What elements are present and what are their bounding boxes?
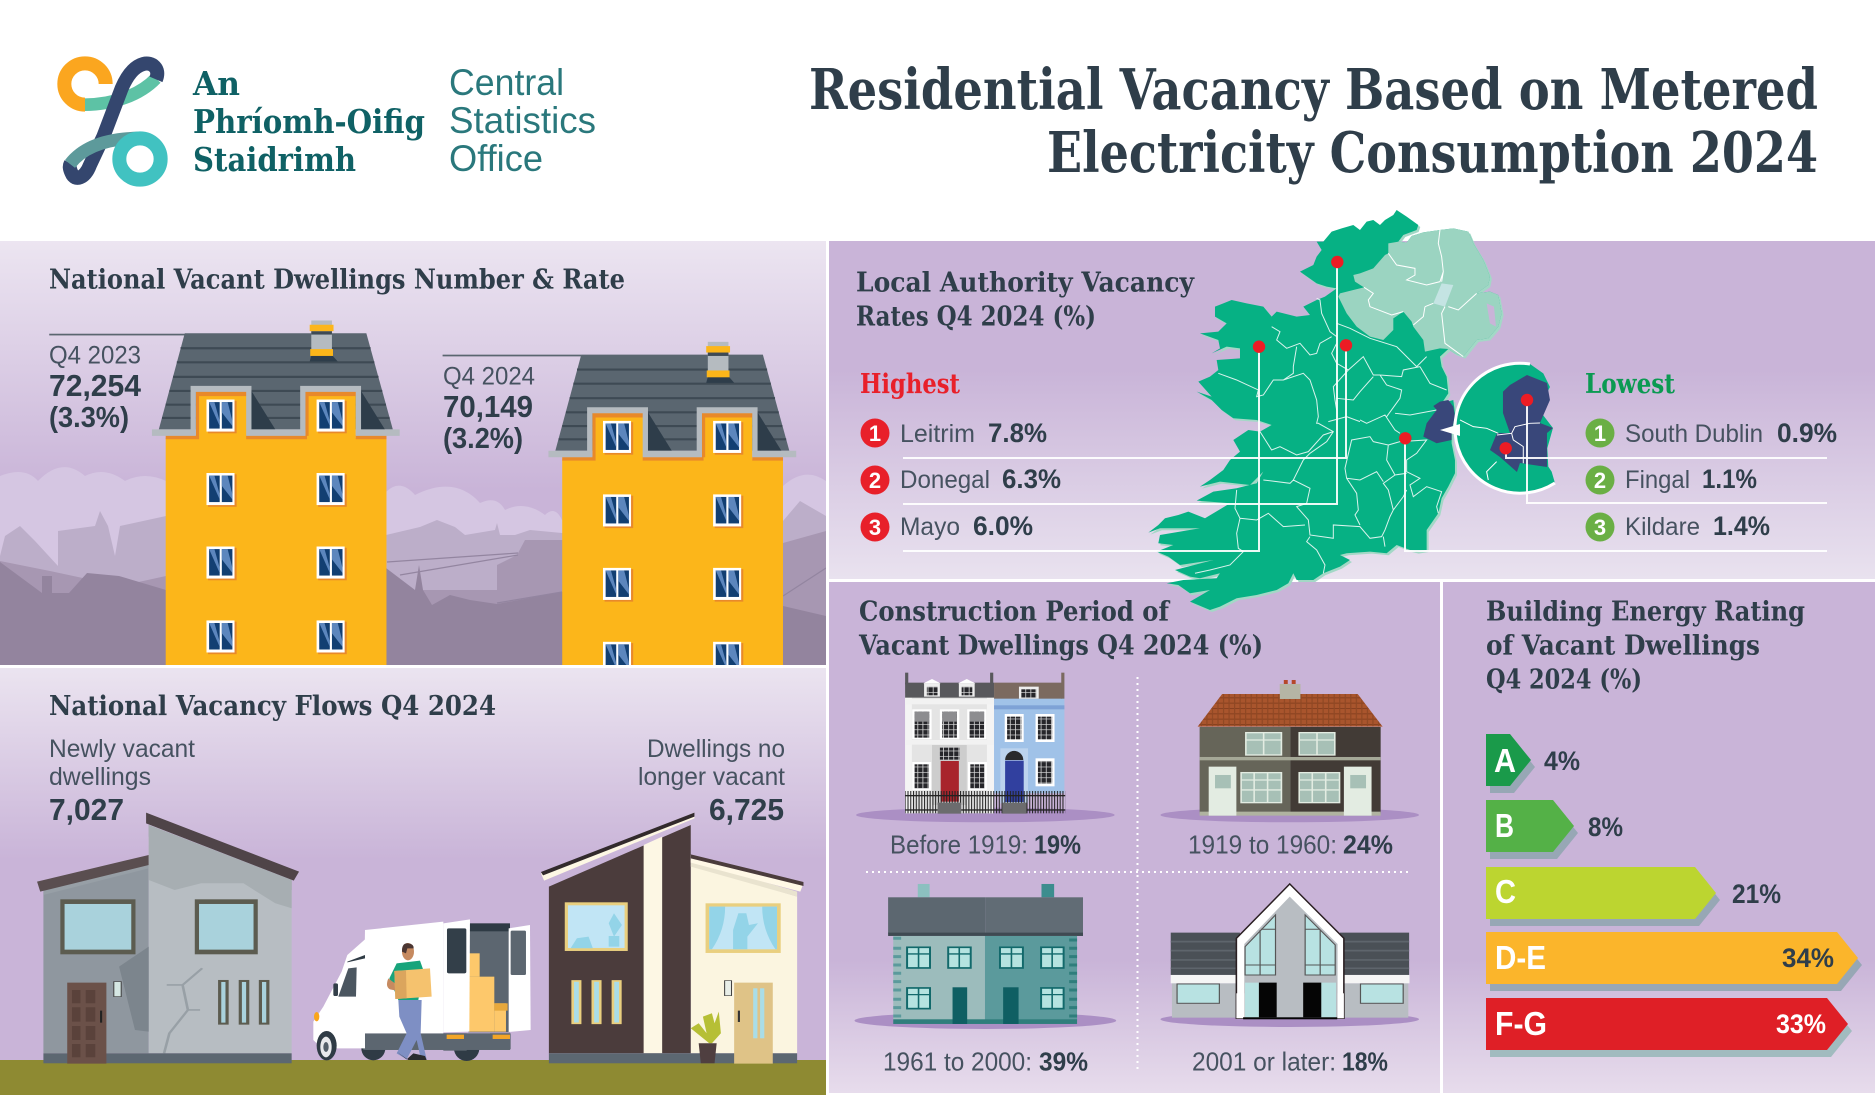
bar: F-G: F-G: [1495, 1005, 1547, 1042]
row: Fingal: [1586, 464, 1757, 494]
heading: [856, 266, 1195, 332]
stat: newly vacant dwellings: [49, 735, 195, 827]
row: Fingal: 2: [1594, 468, 1606, 493]
stat: Q4 2023: [49, 342, 142, 434]
row: Leitrim: 1: [869, 421, 881, 446]
bar: D-E: D-E: [1495, 939, 1546, 976]
row: South Dublin: 1: [1594, 421, 1606, 446]
heading: Lowest: Lowest: [1585, 368, 1675, 400]
stat: dwellings no longer vacant: 6,725: [709, 792, 784, 827]
row: Leitrim: [860, 418, 1047, 448]
building: Q4 2023: [49, 320, 400, 677]
row: Mayo: 3: [869, 515, 881, 540]
heading: Highest: Highest: [860, 368, 960, 400]
heading: Vacant Dwellings Q4 2024 (%): [858, 630, 1263, 662]
row: South Dublin: South Dublin: [1625, 420, 1763, 448]
logo text: English name: [449, 62, 596, 179]
heading: National Vacancy Flows Q4 2024: [49, 690, 496, 722]
stat: Q4 2024: 70,149: [443, 389, 533, 424]
map pins: [1253, 256, 1533, 454]
house: before 1919: [856, 673, 1115, 822]
row: Donegal: 6.3%: [1002, 464, 1061, 494]
house: 1961 to 2000: [855, 884, 1116, 1029]
label: before 1919: Before 1919:: [890, 830, 1028, 860]
logo text: Irish name: An: [192, 64, 240, 103]
row: South Dublin: [1586, 418, 1837, 448]
panel: construction period of vacant dwellings: [829, 582, 1440, 1093]
row: Fingal: 1.1%: [1702, 464, 1757, 494]
stat: dwellings no longer vacant: Dwellings no: [647, 735, 785, 763]
Northern Ireland: [1338, 228, 1502, 357]
bar: B: 8%: [1588, 812, 1623, 842]
panel: building energy rating: [1443, 582, 1875, 1093]
bar: D-E: [1486, 932, 1862, 991]
heading: Building Energy Rating: [1486, 596, 1805, 628]
list: highest vacancy rates: [860, 368, 1061, 542]
county boundaries: [1195, 298, 1447, 573]
row: Donegal: [860, 464, 1061, 494]
logo text: Irish name: Phríomh-Oifig: [193, 102, 425, 141]
row: Mayo: [860, 511, 1033, 542]
stat: newly vacant dwellings: dwellings: [49, 763, 151, 791]
bar: D-E: 34%: [1782, 943, 1834, 973]
stat: newly vacant dwellings: 7,027: [49, 792, 124, 827]
label: 1919 to 1960: 24%: [1343, 830, 1393, 860]
bar: F-G: [1486, 998, 1852, 1057]
stat: Q4 2024: Q4 2024: [443, 362, 535, 390]
skyline backdrop: [0, 467, 826, 665]
bar: A: A: [1494, 742, 1516, 779]
bar: A: [1486, 734, 1580, 793]
label: 1961 to 2000: 39%: [1039, 1046, 1088, 1076]
stat: Q4 2023: Q4 2023: [49, 342, 141, 370]
logo text: English name: Central: [449, 62, 564, 103]
bar: C: [1486, 867, 1781, 926]
bar: B: [1486, 800, 1623, 859]
row: Kildare: Kildare: [1625, 513, 1700, 541]
stat: Q4 2023: 72,254: [49, 368, 142, 403]
row: Leitrim: 7.8%: [988, 418, 1047, 448]
logo text: English name: Statistics: [449, 100, 596, 141]
inset: Dublin local authorities: [1440, 363, 1555, 493]
row: Kildare: 1.4%: [1713, 511, 1770, 541]
row: South Dublin: 0.9%: [1777, 418, 1837, 448]
stat: newly vacant dwellings: Newly vacant: [49, 735, 195, 763]
logo text: Irish name: Staidrimh: [193, 140, 356, 179]
bar: B: B: [1495, 807, 1514, 844]
row: Kildare: [1586, 511, 1770, 542]
house: 1919 to 1960: [1160, 680, 1419, 822]
heading: Q4 2024 (%): [1486, 664, 1642, 696]
header background: [0, 0, 1875, 241]
heading: [858, 596, 1263, 662]
row: Leitrim: Leitrim: [900, 420, 975, 448]
heading: of Vacant Dwellings: [1486, 630, 1760, 662]
ground: [0, 1060, 826, 1095]
stat: Q4 2024: [443, 362, 535, 455]
heading: [1486, 596, 1805, 696]
panel: national vacancy flows: [0, 668, 826, 1095]
heading: Construction Period of: [859, 596, 1171, 628]
title: [809, 57, 1818, 186]
building: Q4 2024: [443, 342, 796, 699]
map of Ireland with local authorities: [1148, 210, 1555, 612]
label: 2001 or later: 18%: [1342, 1046, 1388, 1076]
Dublin highlighted: [1423, 400, 1455, 443]
logo: CSO knot and wordmark: [64, 62, 596, 180]
stat: dwellings no longer vacant: longer vacant: [638, 763, 785, 791]
bar: F-G: 33%: [1776, 1009, 1826, 1039]
stat: Q4 2024: (3.2%): [443, 423, 523, 455]
row: Fingal: Fingal: [1625, 466, 1690, 494]
row: Donegal: 2: [869, 468, 881, 493]
bar: C: C: [1495, 873, 1516, 910]
heading: National Vacant Dwellings Number & Rate: [49, 264, 625, 296]
bar: A: 4%: [1544, 746, 1580, 776]
house: vacant and cracked: [37, 813, 299, 1064]
label: 1961 to 2000: 1961 to 2000:: [883, 1046, 1032, 1076]
house: 2001 or later: [1160, 884, 1419, 1027]
list: lowest vacancy rates: [1585, 368, 1837, 542]
row: Mayo: Mayo: [900, 513, 960, 541]
stat: dwellings no longer vacant: [638, 735, 785, 827]
row: Kildare: 3: [1594, 515, 1606, 540]
logo text: Irish name: [192, 64, 425, 179]
van: moving truck with man carrying box: [313, 919, 531, 1061]
house: occupied: [541, 813, 803, 1064]
panel: local authority vacancy rates: [829, 241, 1875, 579]
label: 1919 to 1960: 1919 to 1960:: [1188, 830, 1337, 860]
heading: Rates Q4 2024 (%): [856, 300, 1096, 332]
logo text: English name: Office: [449, 138, 543, 179]
label: before 1919: 19%: [1034, 830, 1081, 860]
label: 2001 or later: 2001 or later:: [1192, 1046, 1336, 1076]
logo icon: infinity knot: [64, 63, 161, 180]
stat: Q4 2023: (3.3%): [49, 402, 129, 434]
row: Mayo: 6.0%: [973, 511, 1033, 541]
panel: national vacant dwellings number and rate: [0, 241, 826, 699]
heading: Local Authority Vacancy: [856, 266, 1195, 298]
leader lines from map pins to ranked rows: [903, 262, 1827, 551]
row: Donegal: Donegal: [900, 466, 990, 494]
bar: C: 21%: [1732, 879, 1781, 909]
